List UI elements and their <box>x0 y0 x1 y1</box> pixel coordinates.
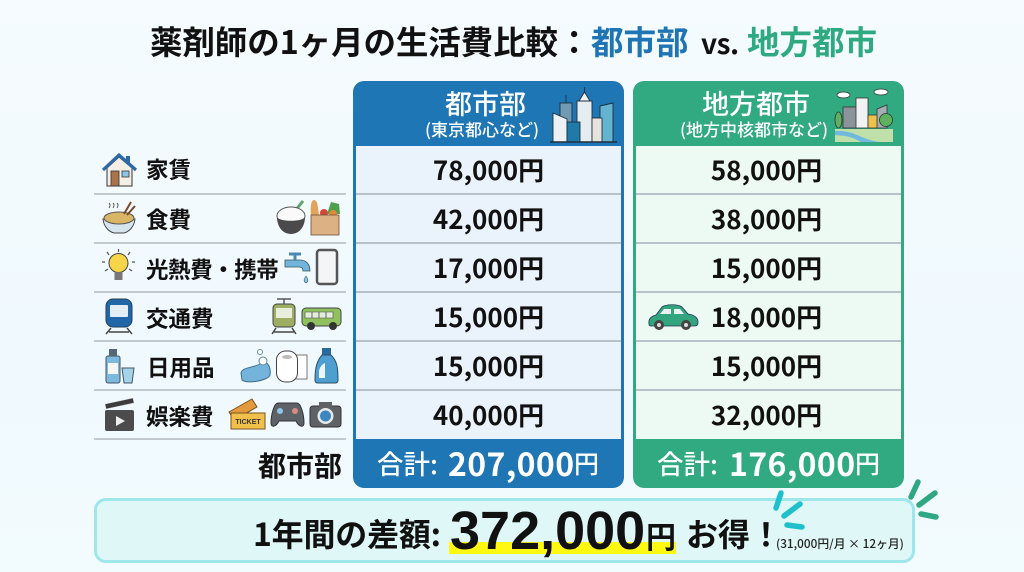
icon: house <box>102 152 137 186</box>
title: 都市部: 都市部 <box>591 17 689 64</box>
value: rent: 58,000円 <box>711 151 822 188</box>
icon: water tap <box>284 252 310 284</box>
value: utilities: 17,000円 <box>433 249 544 286</box>
value: utilities: 15,000円 <box>711 249 822 286</box>
icon: lotion bottle and tube <box>106 349 135 384</box>
value: daily goods: 15,000円 <box>711 347 822 384</box>
value: food: 42,000円 <box>433 200 544 237</box>
icon: detergent bottle <box>314 348 338 384</box>
total yen: 円 <box>574 445 599 481</box>
subheading: 東京都心など: (東京都心など) <box>425 116 539 141</box>
heading: 地方都市: 地方都市 <box>702 83 810 122</box>
icon: green tram <box>271 298 297 334</box>
label: 食費: 食費 <box>146 203 191 235</box>
title <box>150 17 877 64</box>
value: rent: 78,000円 <box>433 151 544 188</box>
total amount: 176,000 <box>729 440 855 486</box>
total label: 合計: <box>657 443 718 482</box>
table: urban values <box>356 146 621 439</box>
value: transport: 18,000円 <box>711 298 822 335</box>
title: main text: 薬剤師の1ヶ月の生活費比較： <box>150 17 590 64</box>
text: yen: 円 <box>646 513 676 557</box>
table: regional values <box>636 146 901 439</box>
icon: green bus <box>302 308 342 330</box>
text: calculation note: (31,000円/月 × 12ヶ月) <box>776 535 904 552</box>
label: 娯楽費: 娯楽費 <box>146 400 214 432</box>
icon: skyscrapers <box>550 87 617 143</box>
icon: toilet paper <box>276 350 308 382</box>
label: 家賃: 家賃 <box>146 153 191 185</box>
icon: clapperboard <box>104 398 134 431</box>
value: entertainment: 32,000円 <box>711 396 822 433</box>
title: vs.: vs. <box>701 23 739 63</box>
subheading: 地方中核都市など: (地方中核都市など) <box>680 116 828 141</box>
value: entertainment: 40,000円 <box>433 396 544 433</box>
label: 日用品: 日用品 <box>147 351 215 383</box>
total label: 合計: <box>377 443 438 482</box>
icon: green sparkle <box>908 479 939 520</box>
callout: annual difference <box>94 498 915 563</box>
icon: smartphone <box>316 248 338 286</box>
icon: game controller <box>270 402 304 427</box>
icon: cyan sparkle <box>773 490 805 530</box>
panel: urban column <box>353 81 624 488</box>
icon: regional town <box>834 88 893 142</box>
title: 地方都市: 地方都市 <box>747 17 877 64</box>
icon: rice bowl <box>276 200 306 234</box>
icon: light bulb <box>102 249 135 280</box>
icon: soap <box>240 349 271 382</box>
icon: tickets: TICKET <box>235 419 261 426</box>
total yen: 円 <box>855 445 880 481</box>
icon: green car <box>648 304 698 330</box>
icon: blue train <box>106 298 132 334</box>
panel: category labels <box>94 153 346 485</box>
value: daily goods: 15,000円 <box>433 347 544 384</box>
icon: camera <box>310 402 342 428</box>
panel: regional column <box>633 81 904 488</box>
total amount: 207,000 <box>448 440 574 486</box>
total: regional <box>657 440 880 486</box>
label: 光熱費・携帯: 光熱費・携帯 <box>146 253 278 285</box>
icon: noodle bowl <box>102 202 136 234</box>
value: transport: 15,000円 <box>433 298 544 335</box>
text: annual label: 1年間の差額: <box>253 510 441 556</box>
icon: grocery bag <box>310 200 340 236</box>
label: 交通費: 交通費 <box>146 302 214 334</box>
label: 都市部 total: 都市部 <box>258 445 342 485</box>
value: food: 38,000円 <box>711 200 822 237</box>
total: urban <box>377 440 599 486</box>
heading: 都市部: 都市部 <box>445 83 526 122</box>
icon: tickets <box>228 398 266 430</box>
text: saving: お得！ <box>686 510 782 556</box>
highlight: yellow marker <box>449 542 676 554</box>
text: amount: 372,000 <box>450 501 645 561</box>
